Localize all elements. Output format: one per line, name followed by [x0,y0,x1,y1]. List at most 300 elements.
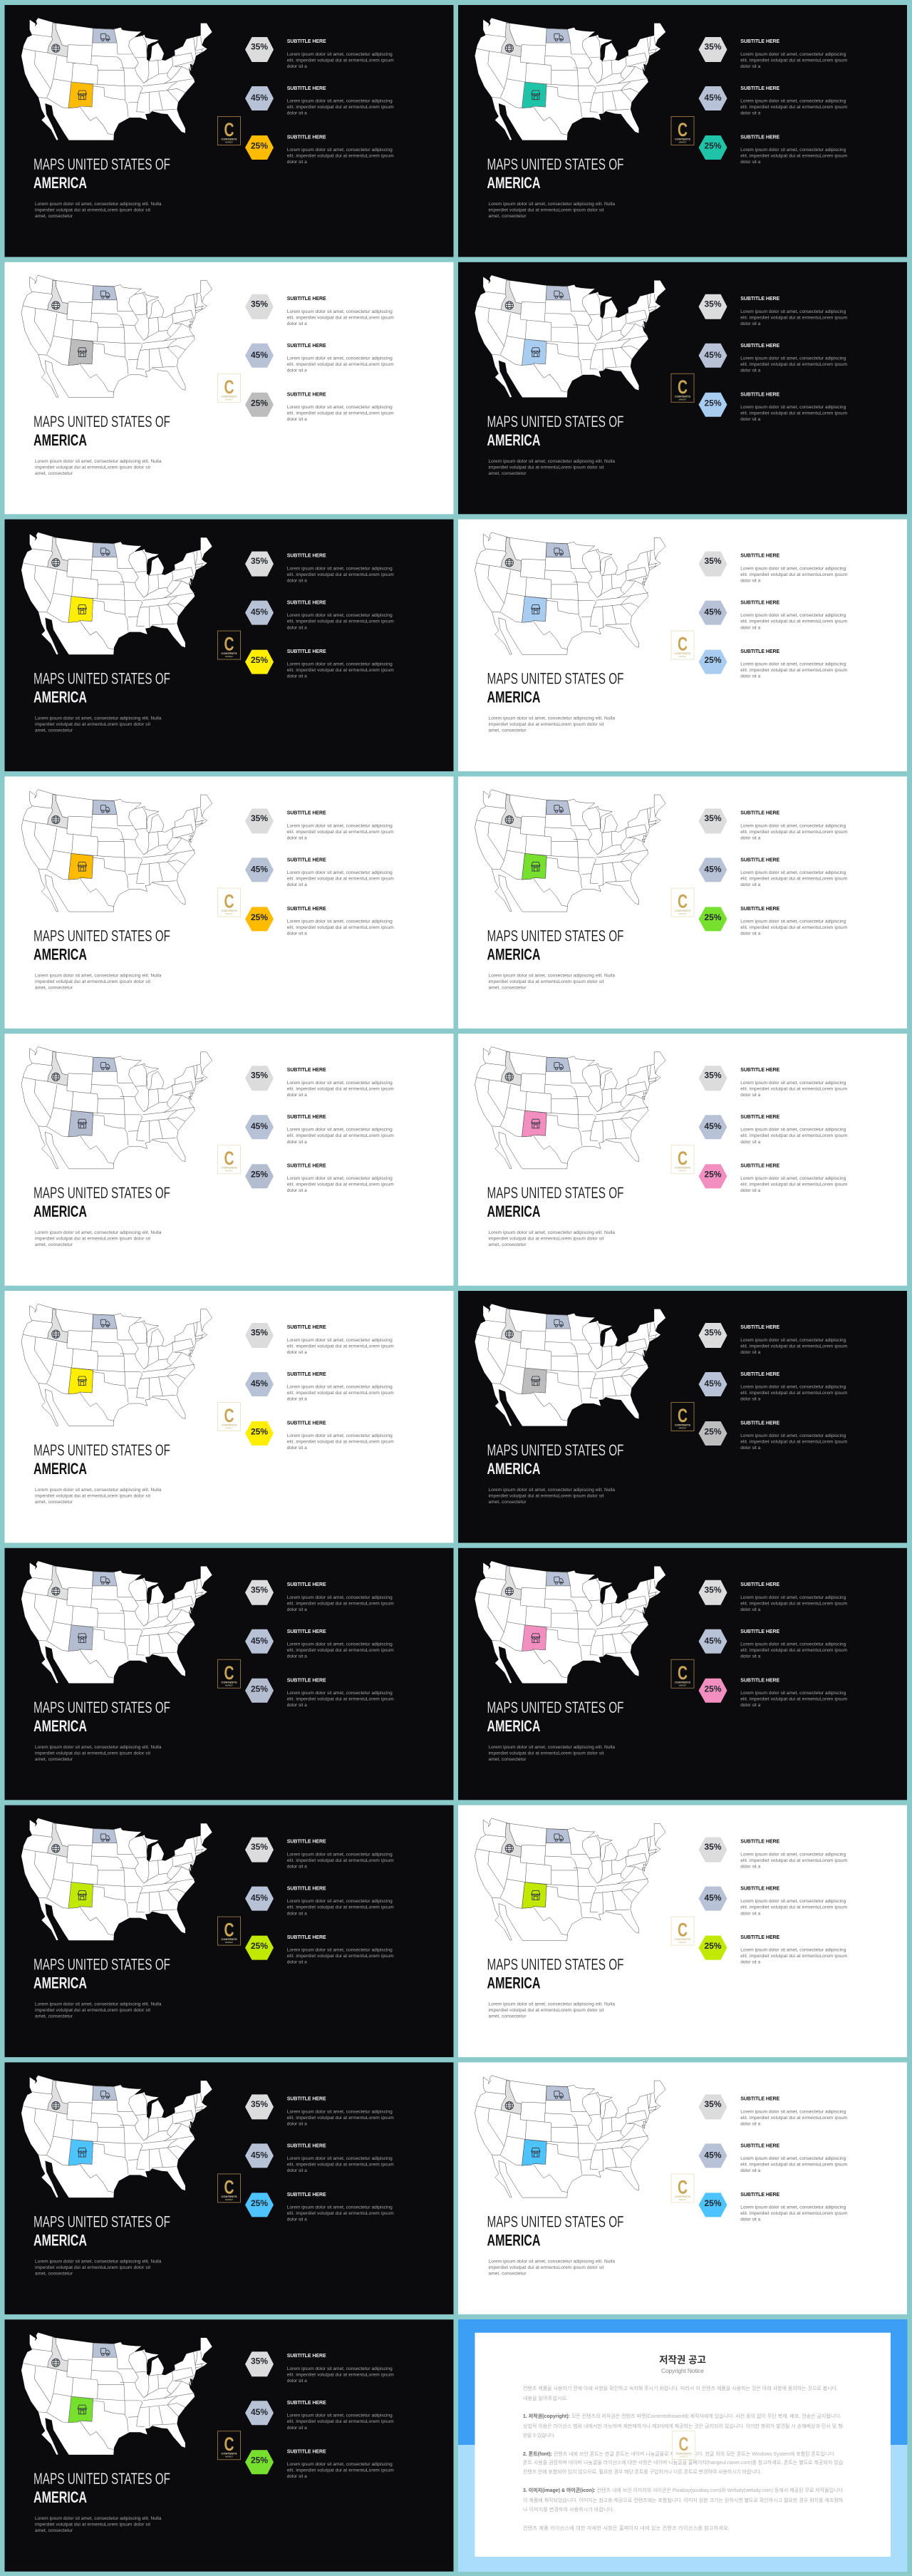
stat 45%: SUBTITLE HERE [287,344,326,349]
logo [671,1917,694,1945]
panel: row 6 right, dark, gray [458,1291,907,1542]
stat 35%: 35% [251,1842,268,1852]
title: AMERICA [487,1460,540,1478]
stat 45% [245,2143,394,2173]
slide background [458,776,907,1029]
stat 45%: SUBTITLE HERE [740,1629,780,1634]
stat 35% [698,1066,847,1098]
paragraph: amet, consectetur [35,1500,73,1505]
map of the United States [21,1304,212,1426]
stat 25%: SUBTITLE HERE [740,1421,780,1426]
map of the United States [475,2076,665,2198]
notice body text: 컨텐츠 제품 라이선스에 대한 자세한 사항은 홈페이지 내에 있는 컨텐츠 라이선스를 참고하세요. [523,2525,730,2531]
stat 25%: Lorem ipsum dolor sit amet, consectetur adipiscing [740,919,846,924]
slide background [4,1291,453,1542]
title [33,1699,170,1735]
stat 45%: Lorem ipsum dolor sit amet, consectetur adipiscing [287,1642,393,1647]
stat 35%: 35% [704,813,722,823]
panel: row 3 left, dark, yellow [4,520,453,771]
stat 25% [698,1421,847,1451]
paragraph: amet, consectetur [489,985,527,990]
title: MAPS UNITED STATES OF [33,1184,170,1202]
stat 35% [698,1323,847,1355]
stat 45% [698,344,847,373]
map of the United States [475,1047,665,1169]
stat 25%: dolor sit a [740,2217,761,2222]
logo: MARKET [225,1941,233,1944]
stat 35%: SUBTITLE HERE [287,810,326,815]
paragraph: Lorem ipsum dolor sit amet, consectetur adipiscing elit. Nulla [35,2259,162,2264]
slide background [4,1034,453,1286]
paragraph: imperdiet volutpat dui at ermentuLorem ipsum dolor sit [35,2523,150,2528]
logo: MARKET [225,912,233,915]
stat 45%: dolor sit a [287,625,307,630]
stat 35%: SUBTITLE HERE [287,1325,326,1330]
logo: MARKET [679,1170,687,1173]
stat 35%: dolor sit a [740,1093,761,1098]
paragraph [489,2259,615,2276]
stat 25%: Lorem ipsum dolor sit amet, consectetur adipiscing [287,148,393,153]
stat 45%: 45% [704,1636,722,1646]
stat 45%: SUBTITLE HERE [287,1115,326,1120]
stat 45%: dolor sit a [740,882,761,887]
logo: MARKET [679,1684,687,1686]
logo: MARKET [679,655,687,658]
stat 25%: 25% [704,1684,722,1694]
title: AMERICA [487,174,540,192]
stat 25%: Lorem ipsum dolor sit amet, consectetur adipiscing [740,1176,846,1181]
stat 25% [245,2193,394,2222]
slide background [4,5,453,257]
notice body text: 컨텐츠 안에 포함되어 있지 않으므로, 필요한 경우 해당 폰트를 구입하거나 다른 폰트로 변경하여 사용하시기 바랍니다. [523,2468,762,2475]
title: AMERICA [33,174,87,192]
logo: C [678,376,688,398]
stat 35% [698,1838,847,1870]
stat 35%: dolor sit a [740,1350,761,1355]
logo: MARKET [225,655,233,658]
stat 25%: SUBTITLE HERE [287,649,326,654]
stat 25%: Lorem ipsum dolor sit amet, consectetur adipiscing [287,919,393,924]
stat 25%: elit. imperdiet volutpat dui at ermentuLorem ipsum [740,154,847,158]
stat 35%: elit. imperdiet volutpat dui at ermentuLorem ipsum [287,315,394,320]
paragraph: amet, consectetur [489,2014,527,2019]
stat 25% [245,2450,394,2479]
stat 25%: Lorem ipsum dolor sit amet, consectetur adipiscing [740,2205,846,2210]
stat 45%: elit. imperdiet volutpat dui at ermentuLorem ipsum [740,619,847,624]
title: AMERICA [33,2231,87,2249]
stat 25%: 25% [251,1427,268,1437]
logo [671,373,694,402]
title: AMERICA [33,431,87,449]
logo: CONTENTS [675,1423,690,1427]
stat 35%: SUBTITLE HERE [287,39,326,44]
stat 45%: 45% [251,350,268,360]
slide background [458,1548,907,1800]
stat 25% [245,1421,394,1451]
stat 45%: elit. imperdiet volutpat dui at ermentuLorem ipsum [740,1391,847,1396]
stat 25% [245,1164,394,1193]
white notice card [475,2333,891,2557]
title [487,413,624,449]
stat 35%: 35% [704,41,722,51]
paragraph [35,1230,162,1247]
map of the United States [475,790,665,912]
stat 25%: 25% [251,912,268,922]
stat 45%: elit. imperdiet volutpat dui at ermentuLorem ipsum [740,1905,847,1910]
panel: row 5 left, light, blue gray [4,1034,453,1286]
stat 25%: Lorem ipsum dolor sit amet, consectetur adipiscing [740,148,846,153]
title [33,155,170,192]
slide background [458,1805,907,2057]
map of the United States [21,1818,212,1940]
stat 35% [245,2351,394,2384]
paragraph: imperdiet volutpat dui at ermentuLorem ipsum dolor sit [489,1237,604,1242]
stat 45%: SUBTITLE HERE [287,2401,326,2406]
stat 45% [245,1372,394,1402]
stat 45%: Lorem ipsum dolor sit amet, consectetur adipiscing [740,98,846,104]
stat 35%: Lorem ipsum dolor sit amet, consectetur adipiscing [287,2109,393,2114]
title [487,1699,624,1735]
logo: MARKET [225,2456,233,2458]
paragraph: imperdiet volutpat dui at ermentuLorem ipsum dolor sit [35,722,150,727]
stat 45%: dolor sit a [740,1397,761,1402]
notice body text: 컨텐츠 제품을 사용하기 전에 아래 사항을 확인하고 숙지해 주시기 바랍니다. 따라서 이 컨텐츠 제품을 사용하는 것은 아래 사항에 동의하는 것으로 봅니다. [523,2385,838,2391]
paragraph: Lorem ipsum dolor sit amet, consectetur adipiscing elit. Nulla [489,1488,615,1493]
stat 25%: 25% [704,2198,722,2208]
stat 45%: dolor sit a [740,368,761,373]
logo [218,2431,241,2460]
paragraph: imperdiet volutpat dui at ermentuLorem ipsum dolor sit [489,1751,604,1756]
paragraph [35,2002,162,2019]
title: AMERICA [33,1460,87,1478]
title: MAPS UNITED STATES OF [33,1699,170,1716]
stat 45%: 45% [704,1893,722,1903]
paragraph [35,716,162,733]
stat 25%: elit. imperdiet volutpat dui at ermentuLorem ipsum [287,1954,394,1959]
stat 25%: Lorem ipsum dolor sit amet, consectetur adipiscing [740,1691,846,1696]
title [33,670,170,706]
stat 45%: elit. imperdiet volutpat dui at ermentuLorem ipsum [287,2162,394,2167]
paragraph: amet, consectetur [35,1757,73,1762]
stat 35%: dolor sit a [740,835,761,840]
stat 35%: Lorem ipsum dolor sit amet, consectetur adipiscing [740,309,846,314]
stat 35%: Lorem ipsum dolor sit amet, consectetur adipiscing [740,823,846,828]
title: AMERICA [487,431,540,449]
slide background [458,1291,907,1542]
stat 45%: 45% [251,93,268,103]
logo [218,1403,241,1431]
stat 45% [698,86,847,116]
logo: CONTENTS [675,1166,690,1170]
stat 45%: dolor sit a [287,1397,307,1402]
stat 45%: elit. imperdiet volutpat dui at ermentuLorem ipsum [287,2419,394,2424]
stat 25%: 25% [704,141,722,151]
paragraph [489,459,615,476]
stat 25%: Lorem ipsum dolor sit amet, consectetur adipiscing [287,405,393,410]
paragraph: imperdiet volutpat dui at ermentuLorem ipsum dolor sit [35,979,150,984]
stat 25%: dolor sit a [287,674,307,679]
map of the United States [21,2076,212,2198]
stat 35%: 35% [251,2099,268,2109]
stat 25%: elit. imperdiet volutpat dui at ermentuLorem ipsum [287,154,394,158]
map of the United States [475,18,665,140]
paragraph: Lorem ipsum dolor sit amet, consectetur adipiscing elit. Nulla [489,202,615,207]
paragraph: Lorem ipsum dolor sit amet, consectetur adipiscing elit. Nulla [35,2002,162,2007]
stat 45%: elit. imperdiet volutpat dui at ermentuLorem ipsum [740,876,847,881]
stat 45% [698,1887,847,1916]
stat 25%: SUBTITLE HERE [287,907,326,912]
logo: C [678,634,688,655]
stat 35%: Lorem ipsum dolor sit amet, consectetur adipiscing [287,1338,393,1343]
logo [218,117,241,145]
stat 35% [245,1838,394,1870]
stat 35%: elit. imperdiet volutpat dui at ermentuLorem ipsum [740,1858,847,1863]
stat 45%: SUBTITLE HERE [740,857,780,862]
title: MAPS UNITED STATES OF [33,927,170,944]
stat 35%: Lorem ipsum dolor sit amet, consectetur adipiscing [740,52,846,57]
logo [673,2431,695,2459]
stat 35%: elit. imperdiet volutpat dui at ermentuLorem ipsum [287,1087,394,1092]
stat 35%: 35% [704,1327,722,1337]
paragraph: Lorem ipsum dolor sit amet, consectetur adipiscing elit. Nulla [35,1230,162,1235]
stat 35%: 35% [704,1071,722,1081]
stat 45%: SUBTITLE HERE [287,857,326,862]
stat 45% [245,1887,394,1916]
stat 35%: dolor sit a [287,1093,307,1098]
stat 25%: dolor sit a [740,1188,761,1193]
logo: C [224,1148,234,1169]
logo: MARKET [225,1427,233,1430]
logo: C [678,1662,688,1684]
stat 35% [245,1323,394,1355]
map of the United States [21,1047,212,1169]
stat 25%: elit. imperdiet volutpat dui at ermentuLorem ipsum [740,1183,847,1187]
stat 45%: 45% [251,864,268,874]
paragraph [489,716,615,733]
title: MAPS UNITED STATES OF [487,1956,624,1974]
logo: MARKET [225,398,233,401]
title: MAPS UNITED STATES OF [33,155,170,173]
paragraph: imperdiet volutpat dui at ermentuLorem ipsum dolor sit [489,722,604,727]
stat 25% [245,1678,394,1708]
stat 25%: Lorem ipsum dolor sit amet, consectetur adipiscing [740,1948,846,1953]
stat 25%: Lorem ipsum dolor sit amet, consectetur adipiscing [287,662,393,667]
logo [218,2174,241,2203]
logo [218,888,241,917]
stat 25%: 25% [251,1941,268,1951]
stat 45%: 45% [251,1893,268,1903]
logo [671,117,694,145]
stat 25%: Lorem ipsum dolor sit amet, consectetur adipiscing [287,1433,393,1438]
panel: row 1 left, dark, orange [4,5,453,257]
paragraph [489,1745,615,1762]
map of the United States [21,2333,212,2455]
logo: MARKET [225,2198,233,2201]
logo: MARKET [679,398,687,401]
logo: MARKET [225,1684,233,1686]
notice body text: 이 제품에 제작되었습니다. 이미지는 참고용 제공으로 컨텐츠에는 포함됩니다. 이미지 원본 크기는 원하시면 별도로 확인하시고 필요한 경우 위치를 재조정하거나 다른 이미지로 변경하세요. [523,2497,908,2503]
map of the United States [475,275,665,397]
stat 35%: Lorem ipsum dolor sit amet, consectetur adipiscing [740,1081,846,1086]
logo: CONTENTS [675,1937,690,1941]
stat 25%: Lorem ipsum dolor sit amet, consectetur adipiscing [740,405,846,410]
stat 45%: SUBTITLE HERE [287,601,326,606]
logo: CONTENTS [221,394,237,398]
stat 25%: elit. imperdiet volutpat dui at ermentuLorem ipsum [740,411,847,416]
stat 35%: Lorem ipsum dolor sit amet, consectetur adipiscing [287,1081,393,1086]
paragraph: Lorem ipsum dolor sit amet, consectetur adipiscing elit. Nulla [489,2259,615,2264]
title [487,2212,624,2249]
stat 45%: elit. imperdiet volutpat dui at ermentuLorem ipsum [287,1133,394,1138]
panel: row 4 left, light, orange [4,776,453,1029]
logo: CONTENTS [221,1937,237,1941]
stat 35%: elit. imperdiet volutpat dui at ermentuLorem ipsum [740,1601,847,1606]
paragraph: Lorem ipsum dolor sit amet, consectetur adipiscing elit. Nulla [35,202,162,207]
title: AMERICA [33,1202,87,1220]
stat 25% [698,1935,847,1965]
stat 25%: SUBTITLE HERE [287,1421,326,1426]
stat 45%: Lorem ipsum dolor sit amet, consectetur adipiscing [740,1899,846,1904]
stat 25%: SUBTITLE HERE [740,649,780,654]
paragraph: amet, consectetur [35,1242,73,1247]
stat 25%: elit. imperdiet volutpat dui at ermentuLorem ipsum [287,2468,394,2473]
title: AMERICA [487,1717,540,1735]
paragraph: imperdiet volutpat dui at ermentuLorem ipsum dolor sit [35,2008,150,2013]
logo: CONTENTS [221,1680,237,1684]
logo: CONTENTS [675,651,690,655]
stat 45% [698,1629,847,1659]
stat 45%: dolor sit a [287,1911,307,1916]
stat 45%: SUBTITLE HERE [287,1372,326,1377]
stat 25%: Lorem ipsum dolor sit amet, consectetur adipiscing [287,2205,393,2210]
title: AMERICA [487,1974,540,1992]
stat 35% [698,2094,847,2126]
panel: row 5 right, light, pink [458,1034,907,1286]
stat 35%: elit. imperdiet volutpat dui at ermentuLorem ipsum [740,2116,847,2121]
logo: MARKET [225,141,233,144]
paragraph: imperdiet volutpat dui at ermentuLorem ipsum dolor sit [35,465,150,470]
logo: MARKET [225,1170,233,1173]
blue background, upper band [458,2319,908,2445]
stat 45%: Lorem ipsum dolor sit amet, consectetur adipiscing [287,1128,393,1133]
title: MAPS UNITED STATES OF [33,1956,170,1974]
stat 25%: SUBTITLE HERE [287,392,326,397]
stat 45%: 45% [704,607,722,617]
paragraph: Lorem ipsum dolor sit amet, consectetur adipiscing elit. Nulla [489,1745,615,1750]
paragraph: imperdiet volutpat dui at ermentuLorem ipsum dolor sit [35,1494,150,1498]
paragraph [489,1230,615,1247]
paragraph [489,1488,615,1505]
stat 45%: Lorem ipsum dolor sit amet, consectetur adipiscing [740,1642,846,1647]
logo: C [678,119,688,140]
title: AMERICA [33,2488,87,2506]
slide background [4,1548,453,1800]
stat 25%: dolor sit a [287,1446,307,1451]
stat 25%: 25% [704,398,722,408]
stat 25%: dolor sit a [287,2474,307,2479]
stat 35%: SUBTITLE HERE [740,1325,780,1330]
stat 35%: 35% [251,1585,268,1594]
stat 35% [245,2094,394,2126]
logo: CONTENTS [221,651,237,655]
logo: C [678,1405,688,1426]
stat 45%: elit. imperdiet volutpat dui at ermentuLorem ipsum [740,2162,847,2167]
stat 45%: dolor sit a [287,368,307,373]
panel: row 7 right, dark, pink [458,1548,907,1800]
stat 25%: Lorem ipsum dolor sit amet, consectetur adipiscing [740,662,846,667]
panel: row 10 left, dark, green [4,2319,453,2572]
stat 45%: 45% [251,1121,268,1131]
logo: CONTENTS [221,2452,237,2456]
stat 35%: elit. imperdiet volutpat dui at ermentuLorem ipsum [287,2373,394,2378]
title [487,670,624,706]
paragraph [35,459,162,476]
stat 35%: dolor sit a [287,835,307,840]
title [33,927,170,963]
stat 35%: SUBTITLE HERE [287,1068,326,1073]
stat 45%: 45% [251,607,268,617]
stat 35%: 35% [251,1071,268,1081]
logo [671,1145,694,1174]
title: AMERICA [487,689,540,706]
stat 45%: dolor sit a [740,2168,761,2173]
map of the United States [21,532,212,654]
stat 25%: SUBTITLE HERE [287,1678,326,1683]
logo [671,1659,694,1688]
stat 45%: Lorem ipsum dolor sit amet, consectetur adipiscing [740,870,846,875]
stat 45%: 45% [704,2150,722,2160]
stat 45%: Lorem ipsum dolor sit amet, consectetur adipiscing [287,1899,393,1904]
slide background [458,5,907,257]
stat 45%: SUBTITLE HERE [287,1887,326,1892]
logo: CONTENTS [675,1680,690,1684]
stat 45%: elit. imperdiet volutpat dui at ermentuLorem ipsum [287,1391,394,1396]
panel: row 8 right, light, lime [458,1805,907,2057]
logo [671,1403,694,1431]
stat 35%: SUBTITLE HERE [740,810,780,815]
paragraph: amet, consectetur [35,471,73,476]
stat 45%: 45% [251,1636,268,1646]
stat 45%: dolor sit a [287,1654,307,1659]
stat 35%: 35% [704,1842,722,1852]
stat 45%: dolor sit a [740,1140,761,1145]
logo: MARKET [680,2455,688,2458]
stat 25% [245,649,394,679]
stat 45%: Lorem ipsum dolor sit amet, consectetur adipiscing [287,2413,393,2418]
logo [218,1659,241,1688]
stat 35%: elit. imperdiet volutpat dui at ermentuLorem ipsum [740,1344,847,1349]
stat 35%: elit. imperdiet volutpat dui at ermentuLorem ipsum [287,830,394,835]
stat 25%: dolor sit a [287,417,307,422]
stat 35%: 35% [251,41,268,51]
logo: C [224,1920,234,1941]
paragraph: imperdiet volutpat dui at ermentuLorem ipsum dolor sit [489,2265,604,2270]
stat 35%: SUBTITLE HERE [740,1068,780,1073]
title [33,1441,170,1478]
stat 35%: 35% [704,1585,722,1594]
stat 35%: Lorem ipsum dolor sit amet, consectetur adipiscing [287,2366,393,2371]
notice heading: 저작권 공고 [659,2355,706,2365]
paragraph: amet, consectetur [489,728,527,733]
logo: MARKET [679,1941,687,1944]
stat 35%: dolor sit a [287,64,307,69]
title: MAPS UNITED STATES OF [487,927,624,944]
logo: CONTENTS [221,1423,237,1427]
stat 35%: dolor sit a [287,1607,307,1612]
title [33,413,170,449]
title [487,1441,624,1478]
paragraph: Lorem ipsum dolor sit amet, consectetur adipiscing elit. Nulla [35,2516,162,2521]
